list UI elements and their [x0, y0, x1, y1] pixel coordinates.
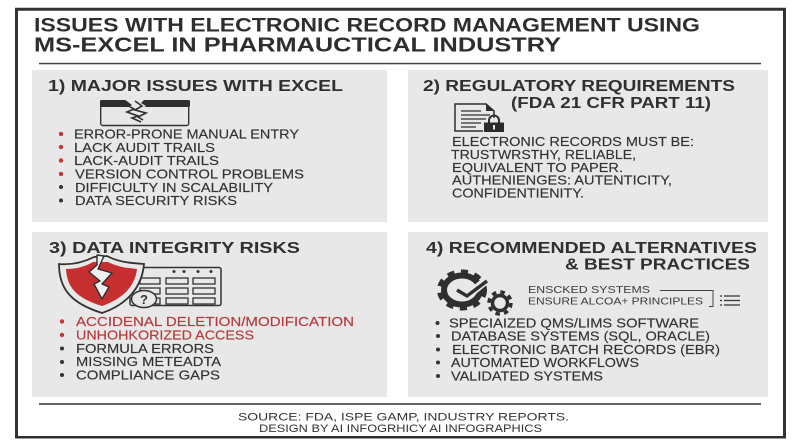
panel: major issues with Excel: [32, 70, 387, 222]
footer: sources and credit: [238, 412, 569, 435]
list: Excel issues: VERSION CONTROL PROBLEMS: [75, 168, 304, 182]
title: MS-EXCEL IN PHARMAUCTICAL INDUSTRY: [34, 34, 562, 56]
panel: regulatory requirements: [408, 70, 768, 222]
panel: recommended alternatives: [408, 232, 768, 397]
icon: document with padlock: [455, 103, 504, 132]
list: data integrity risks: COMPLIANCE GAPS: [76, 368, 220, 382]
heading: data integrity risks: 3) DATA INTEGRITY RISKS: [49, 240, 300, 257]
heading: regulatory requirements: [423, 78, 735, 112]
list: Excel issues: LACK-AUDIT TRAILS: [74, 154, 219, 168]
icon: question mark bubble: ?: [140, 292, 148, 307]
list: Excel issues: DATA SECURITY RISKS: [75, 194, 237, 208]
text: electronic record requirements: AUTHENIENGES: AUTENTICITY,: [452, 174, 672, 188]
panel: data integrity risks: [32, 232, 387, 397]
text: electronic record requirements: EQUIVALENT TO PAPER.: [452, 161, 623, 175]
list: best practices: [436, 316, 720, 384]
list: Excel issues: [59, 128, 304, 208]
callout: ALCOA+ principles: [528, 284, 740, 308]
title: ISSUES WITH ELECTRONIC RECORD MANAGEMENT USING: [34, 14, 700, 36]
list: best practices: VALIDATED SYSTEMS: [451, 370, 603, 384]
heading: recommended alternatives: & BEST PRACTICES: [565, 256, 750, 274]
list: Excel issues: LACK AUDIT TRAILS: [74, 141, 215, 155]
list: data integrity risks: [60, 315, 354, 382]
list: data integrity risks: ACCIDENAL DELETION/MODIFICATION: [76, 315, 354, 329]
list: Excel issues: ERROR-PRONE MANUAL ENTRY: [74, 128, 300, 142]
callout: ALCOA+ principles: ENSURE ALCOA+ PRINCIPLES: [528, 296, 703, 308]
list: best practices: DATABASE SYSTEMS (SQL, ORACLE): [451, 330, 710, 344]
callout: ALCOA+ principles: ENSCKED SYSTEMS: [528, 284, 650, 296]
list: best practices: AUTOMATED WORKFLOWS: [451, 356, 639, 370]
icon: broken spreadsheet window: [100, 99, 190, 126]
heading: major issues: 1) MAJOR ISSUES WITH EXCEL: [48, 78, 343, 95]
icon: question mark bubble: [132, 290, 156, 308]
icon: gears with check mark: [440, 272, 511, 314]
icon: data grid: [130, 268, 221, 306]
text: electronic record requirements: ELECTRONIC RECORDS MUST BE:: [452, 135, 694, 149]
list: data integrity risks: UNHOHKORIZED ACCESS: [76, 328, 254, 342]
title: [34, 14, 700, 56]
heading: recommended alternatives: [426, 240, 757, 274]
icon: checklist lines: [720, 296, 740, 305]
footer: sources and credit: SOURCE: FDA, ISPE GAMP, INDUSTRY REPORTS.: [238, 412, 569, 424]
text: electronic record requirements: CONFIDENTIENITY.: [452, 186, 584, 200]
list: data integrity risks: MISSING METEADTA: [76, 355, 222, 369]
list: data integrity risks: FORMULA ERRORS: [76, 342, 214, 356]
icon: broken red shield: [59, 255, 144, 313]
footer: sources and credit: DESIGN BY AI INFOGRHICY AI INFOGRAPHICS: [259, 423, 542, 435]
heading: recommended alternatives: 4) RECOMMENDED ALTERNATIVES: [426, 240, 757, 257]
heading: regulatory requirements: (FDA 21 CFR PART 11): [511, 95, 711, 112]
text: electronic record requirements: TRUSTWRSTHY, RELIABLE,: [451, 148, 636, 162]
list: Excel issues: DIFFICULTY IN SCALABILITY: [75, 181, 274, 195]
heading: regulatory requirements: 2) REGULATORY REQUIREMENTS: [423, 78, 735, 95]
list: best practices: ELECTRONIC BATCH RECORDS (EBR): [452, 343, 720, 357]
text: electronic record requirements: [451, 135, 694, 200]
list: best practices: SPECIAIZED QMS/LIMS SOFTWARE: [449, 316, 699, 330]
